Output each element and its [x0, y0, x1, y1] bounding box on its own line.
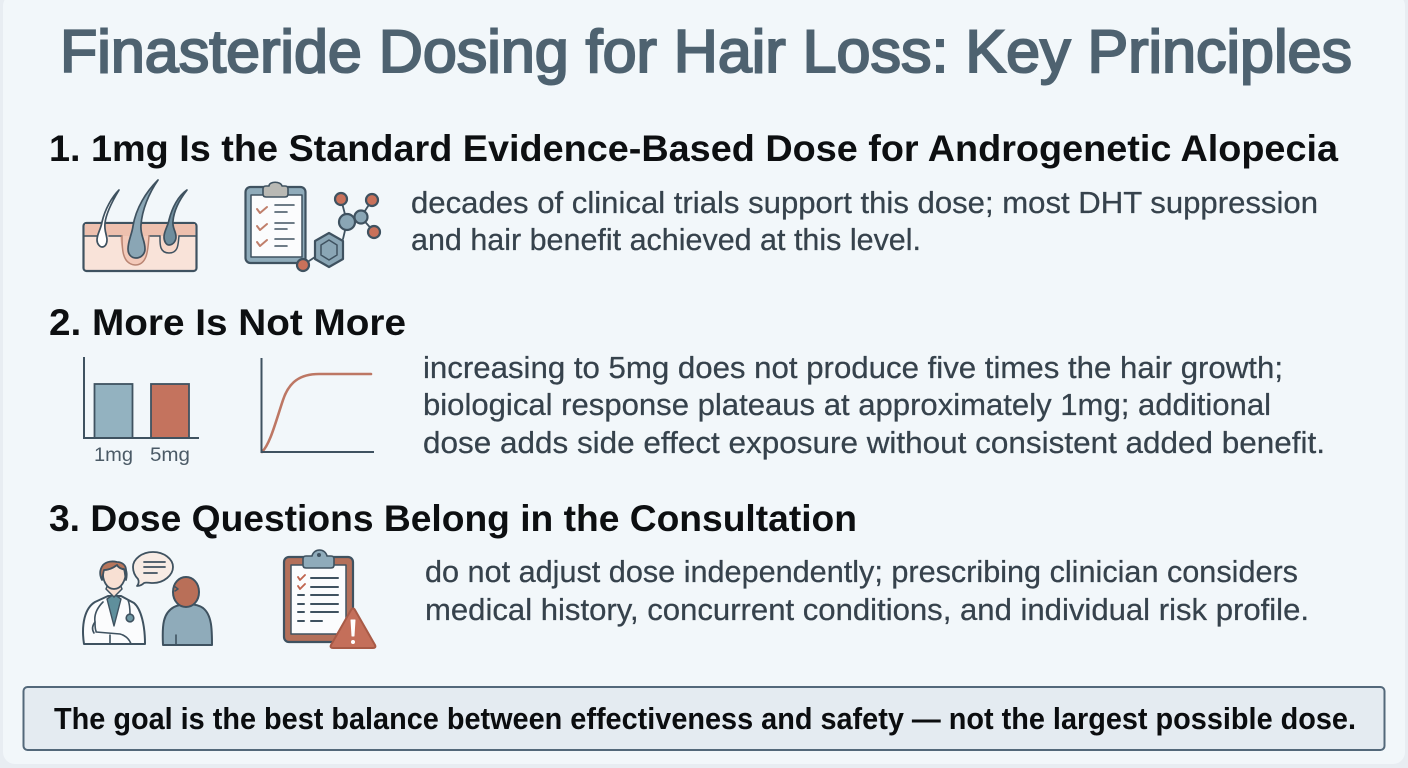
text: principle 1 body: and hair benefit achieved at this level. — [411, 223, 921, 257]
text: principle 2 body: increasing to 5mg does not produce five times the hair growth; — [423, 351, 1283, 385]
bar chart: 1mg vs 5mg — [84, 357, 199, 466]
text: principle 3 body: medical history, concurrent conditions, and individual risk profile. — [425, 593, 1309, 627]
text: principle 2 body: biological response plateaus at approximately 1mg; additional — [423, 388, 1271, 422]
icon: hair follicles in skin — [84, 180, 196, 271]
heading: principle 2: 2. More Is Not More — [49, 302, 406, 343]
title: Finasteride Dosing for Hair Loss: Key Principles — [60, 18, 1352, 85]
icon: clipboard and molecule — [246, 182, 380, 271]
heading: principle 3: 3. Dose Questions Belong in the Consultation — [49, 498, 857, 539]
line chart: dose response plateau — [262, 358, 374, 452]
text: principle 3 body: do not adjust dose independently; prescribing clinician considers — [425, 555, 1298, 589]
bar chart: 1mg vs 5mg: 5mg — [150, 445, 190, 466]
text: principle 2 body: dose adds side effect exposure without consistent added benefit. — [423, 426, 1325, 460]
text: principle 2 body — [423, 351, 1325, 460]
callout: goal statement: The goal is the best balance between effectiveness and safety — not the largest possible dose. — [54, 702, 1356, 736]
text: principle 1 body: decades of clinical trials support this dose; most DHT suppression — [411, 186, 1318, 220]
text: principle 3 body — [425, 555, 1309, 627]
heading: principle 1: 1. 1mg Is the Standard Evidence-Based Dose for Androgenetic Alopecia — [49, 128, 1338, 169]
text: principle 1 body — [411, 186, 1318, 257]
bar chart: 1mg vs 5mg: 1mg — [94, 445, 133, 466]
icon: clipboard with warning triangle — [284, 550, 375, 648]
icon: clinician talking with patient — [83, 552, 212, 645]
callout: goal statement — [24, 687, 1384, 750]
